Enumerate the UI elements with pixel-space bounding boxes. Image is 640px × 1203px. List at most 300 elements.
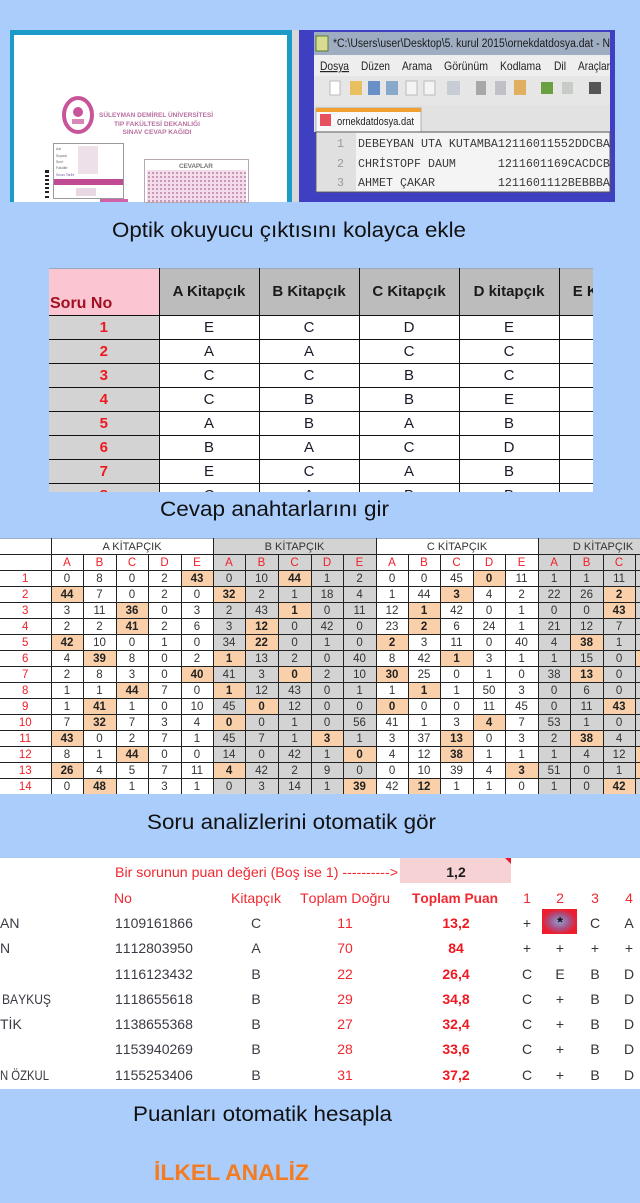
panel: item analysis table: 0: [291, 620, 298, 632]
panel: score table: [0, 858, 640, 1089]
panel: item analysis table: 1: [551, 652, 557, 664]
file contents: 1: [337, 137, 344, 151]
total score: 37,2: [442, 1067, 470, 1083]
student numbers: 1155253406: [115, 1067, 193, 1083]
panel: item analysis table: 0: [583, 764, 590, 776]
panel: item analysis table: 3: [518, 684, 525, 696]
panel: item analysis table: 8: [96, 572, 103, 584]
panel: item analysis table: 1: [421, 684, 427, 696]
panel: item analysis table: 3: [453, 716, 460, 728]
panel: answer key table: A Kitapçık: [173, 283, 245, 300]
panel: item analysis table: 10: [93, 636, 106, 648]
panel: item analysis table: D KİTAPÇIK: [573, 540, 633, 552]
panel: item analysis table: 0: [356, 636, 363, 648]
panel: item analysis table: 12: [418, 780, 430, 792]
panel: answer key table: B: [504, 462, 514, 480]
total score: 84: [448, 940, 464, 956]
panel: item analysis table: 12: [255, 620, 268, 632]
panel: item analysis table: 1: [453, 652, 460, 664]
panel: item analysis table: D: [323, 556, 331, 568]
panel: item analysis table: 42: [288, 748, 301, 760]
student names: AN: [0, 915, 19, 931]
answers per question: D: [624, 1067, 634, 1083]
panel: item analysis table: 39: [93, 652, 106, 664]
student numbers: 1118655618: [115, 991, 193, 1007]
panel: item analysis table: 0: [226, 780, 232, 792]
panel: item analysis table: 26: [61, 764, 73, 776]
panel: item analysis table: 44: [288, 572, 301, 584]
panel: item analysis table: 40: [515, 636, 528, 648]
panel: item analysis table: 0: [291, 668, 298, 680]
panel: item analysis table: 10: [418, 764, 430, 776]
window title bar: *C:\Users\user\Desktop\5. kurul 2015\ornekdatdosya.dat - N: [333, 38, 610, 50]
panel: item analysis table: 12: [418, 748, 430, 760]
panel: item analysis table: 42: [386, 780, 398, 792]
panel: item analysis table: 32: [223, 588, 235, 600]
file contents: [316, 132, 610, 192]
student names: N ÖZKUL: [0, 1066, 49, 1083]
total correct: [337, 915, 353, 1083]
panel: answer key table: 5: [100, 414, 108, 432]
panel: item analysis table: 2: [421, 620, 427, 632]
panel: item analysis table: 10: [353, 668, 366, 680]
panel: item analysis table: 11: [483, 700, 495, 712]
panel: item analysis table: [0, 538, 640, 794]
menu bar: Arama: [402, 59, 432, 73]
panel: item analysis table: 11: [516, 572, 528, 584]
panel: answer key table: 4: [100, 390, 108, 408]
panel: item analysis table: 26: [580, 588, 593, 600]
panel: item analysis table: 9: [22, 700, 28, 712]
panel: item analysis table: 8: [22, 684, 28, 696]
panel: item analysis table: 2: [356, 572, 363, 584]
answers per question: +: [556, 1067, 564, 1083]
panel: item analysis table: 38: [580, 732, 593, 744]
panel: item analysis table: 4: [194, 716, 200, 728]
panel: item analysis table: 39: [353, 780, 366, 792]
student names: TİK: [0, 1015, 22, 1032]
panel: item analysis table: 43: [613, 700, 625, 712]
panel: item analysis table: 1: [291, 732, 298, 744]
panel: answer key table: C Kitapçık: [372, 283, 446, 300]
panel: item analysis table: 0: [421, 572, 427, 584]
panel: item analysis table: 2: [389, 636, 395, 648]
column headers: Toplam Puan: [412, 890, 498, 906]
panel: item analysis table: 3: [258, 780, 265, 792]
panel: item analysis table: 0: [486, 604, 492, 616]
panel: answer key table: 7: [100, 462, 108, 480]
panel: item analysis table: 0: [324, 604, 330, 616]
panel: item analysis table: 9: [324, 764, 330, 776]
panel: item analysis table: 3: [486, 652, 492, 664]
booklet letters: B: [251, 991, 261, 1007]
panel: answer key table: A: [304, 342, 314, 360]
panel: item analysis table: 3: [258, 668, 265, 680]
panel: item analysis table: 0: [616, 716, 622, 728]
panel: item analysis table: 0: [551, 604, 557, 616]
panel: item analysis table: 0: [421, 700, 427, 712]
answers per question: [522, 915, 634, 1083]
panel: item analysis table: 1: [22, 572, 28, 584]
panel: item analysis table: B KİTAPÇIK: [265, 540, 324, 552]
panel: item analysis table: 3: [453, 588, 460, 600]
file contents: AHMET ÇAKAR 1211601112BEBBBA: [358, 176, 610, 190]
panel: item analysis table: 1: [194, 780, 200, 792]
column headers: [114, 890, 633, 906]
panel: answer key table: A: [404, 462, 414, 480]
panel: item analysis table: 34: [223, 636, 235, 648]
column headers: Toplam Doğru: [300, 890, 390, 906]
panel: item analysis table: 7: [518, 716, 525, 728]
timing marks: [45, 170, 49, 198]
panel: item analysis table: 0: [616, 668, 622, 680]
student info box: Sınav Tarihi: [56, 173, 74, 177]
panel: answer key table: Soru No: [50, 295, 112, 312]
answers per question: E: [555, 966, 565, 982]
panel: answer key table: B: [404, 366, 414, 384]
column headers: 3: [591, 890, 599, 906]
panel: item analysis table: 1: [226, 684, 232, 696]
answers per question: C: [522, 1016, 532, 1032]
panel: item analysis table: 3: [22, 604, 28, 616]
panel: item analysis table: 2: [291, 764, 298, 776]
menu bar: Dosya: [320, 59, 349, 73]
panel: item analysis table: 7: [616, 620, 622, 632]
panel: item analysis table: 0: [64, 780, 70, 792]
panel: item analysis table: 1: [486, 668, 492, 680]
student numbers: 1112803950: [115, 940, 193, 956]
booklet letters: A: [251, 940, 261, 956]
panel: item analysis table: 3: [324, 732, 330, 744]
panel: item analysis table: 0: [129, 572, 135, 584]
panel: item analysis table: 4: [22, 620, 28, 632]
answers per question: +: [556, 940, 564, 956]
panel: item analysis table: 45: [223, 732, 235, 744]
student numbers: [115, 915, 193, 1083]
panel: item analysis table: 0: [258, 716, 265, 728]
panel: item analysis table: 45: [450, 572, 463, 584]
panel: item analysis table: 4: [226, 764, 232, 776]
panel: item analysis table: 13: [580, 668, 593, 680]
file tab: ornekdatdosya.dat: [337, 116, 414, 128]
panel: item analysis table: 4: [551, 636, 557, 648]
panel: item analysis table: 0: [356, 620, 363, 632]
panel: item analysis table: 1: [96, 684, 103, 696]
panel: item analysis table: 25: [418, 668, 430, 680]
total correct: 27: [337, 1016, 353, 1032]
panel: item analysis table: 2: [64, 668, 70, 680]
panel: item analysis table: 15: [580, 652, 593, 664]
panel: item analysis table: 0: [258, 748, 265, 760]
panel: item analysis table: 51: [548, 764, 560, 776]
panel: answer key table: 3: [100, 366, 108, 384]
panel: item analysis table: 21: [548, 620, 560, 632]
panel: answer key table: C: [304, 318, 314, 336]
panel: answer key table: B Kitapçık: [272, 283, 346, 300]
panel: answer key table: D: [504, 438, 514, 456]
panel: answer key table: A: [204, 414, 214, 432]
panel: item analysis table: 42: [613, 780, 625, 792]
panel: item analysis table: 11: [613, 572, 625, 584]
menu bar: Araçlar: [578, 59, 610, 73]
total correct: 70: [337, 940, 353, 956]
panel: item analysis table: 44: [418, 588, 430, 600]
answers box: [144, 160, 248, 202]
answers per question: +: [591, 940, 599, 956]
panel: item analysis table: 8: [64, 748, 70, 760]
file contents: DEBEYBAN UTA KUTAMBA12116011552DDCBA: [358, 137, 610, 151]
panel: item analysis table: 48: [93, 780, 106, 792]
panel: item analysis table: 0: [486, 636, 492, 648]
panel: answer key table: B: [404, 390, 414, 408]
panel: item analysis table: 10: [19, 716, 32, 728]
toolbar icons: [314, 76, 610, 105]
panel: item analysis table: 1: [291, 588, 298, 600]
panel: item analysis table: 1: [129, 780, 135, 792]
panel: item analysis table: 2: [291, 652, 298, 664]
panel: item analysis table: 1: [583, 572, 590, 584]
panel: item analysis table: 1: [421, 604, 427, 616]
total correct: 31: [337, 1067, 353, 1083]
panel: item analysis table: 1: [96, 748, 103, 760]
panel: item analysis table: 0: [389, 572, 395, 584]
student numbers: 1138655368: [115, 1016, 193, 1032]
panel: item analysis table: 43: [61, 732, 73, 744]
panel: item analysis table: 1: [453, 780, 460, 792]
panel: answer key table: E: [504, 390, 514, 408]
answers per question: C: [522, 1041, 532, 1057]
answers box: CEVAPLAR: [179, 163, 213, 170]
student numbers: 1153940269: [115, 1041, 193, 1057]
panel: item analysis table: B: [420, 556, 428, 568]
panel: item analysis table: 2: [161, 588, 168, 600]
panel: item analysis table: 24: [483, 620, 495, 632]
panel: item analysis table: 0: [161, 604, 168, 616]
student info box: Adı: [56, 147, 61, 151]
student info box: [54, 144, 124, 198]
panel: item analysis table: 1: [291, 604, 298, 616]
panel: item analysis table: 5: [129, 764, 135, 776]
answers per question: C: [522, 1067, 532, 1083]
total correct: 11: [337, 915, 353, 931]
panel: item analysis table: 43: [288, 684, 301, 696]
panel: item analysis table: 0: [583, 780, 590, 792]
panel: item analysis table: 6: [583, 684, 590, 696]
panel: answer key table: C: [204, 390, 214, 408]
panel: data file window: [299, 30, 615, 202]
title: İLKEL ANALİZ: İLKEL ANALİZ: [154, 1160, 309, 1185]
total correct: 22: [337, 966, 353, 982]
panel: item analysis table: 3: [194, 604, 200, 616]
panel: item analysis table: 3: [226, 620, 232, 632]
panel: item analysis table: 42: [418, 652, 430, 664]
panel: item analysis table: 1: [324, 572, 330, 584]
panel: answer key table: E: [204, 462, 214, 480]
panel: item analysis table: 3: [518, 732, 525, 744]
highlighted cell: [542, 909, 577, 934]
icon: university seal: [64, 98, 92, 132]
answers per question: B: [590, 991, 600, 1007]
panel: item analysis table: 0: [194, 636, 200, 648]
panel: item analysis table: A: [550, 556, 558, 568]
panel: answer key table: B: [304, 414, 314, 432]
booklet letters: C: [251, 915, 261, 931]
panel: item analysis table: 7: [96, 588, 103, 600]
panel: item analysis table: 3: [518, 764, 525, 776]
panel: item analysis table: 0: [96, 732, 103, 744]
panel: item analysis table: 4: [486, 764, 492, 776]
panel: item analysis table: 11: [354, 604, 365, 616]
column headers: 4: [625, 890, 633, 906]
menu bar: [314, 55, 610, 76]
total score: [442, 915, 470, 1083]
score per question setting: 1,2: [446, 864, 466, 880]
panel: item analysis table: 11: [19, 732, 31, 744]
panel: item analysis table: 4: [356, 588, 363, 600]
panel: item analysis table: 7: [22, 668, 28, 680]
panel: item analysis table: 7: [258, 732, 265, 744]
panel: item analysis table: A: [225, 556, 233, 568]
panel: item analysis table: 0: [389, 764, 395, 776]
panel: item analysis table: 13: [255, 652, 268, 664]
panel: item analysis table: 0: [226, 572, 232, 584]
panel: item analysis table: 43: [191, 572, 203, 584]
panel: item analysis table: 2: [129, 732, 135, 744]
sheet heading: TIP FAKÜLTESİ DEKANLIĞI: [114, 119, 200, 128]
panel: item analysis table: 1: [389, 684, 395, 696]
panel: item analysis table: 3: [161, 716, 168, 728]
panel: item analysis table: 37: [418, 732, 430, 744]
panel: item analysis table: 0: [486, 732, 492, 744]
panel: answer key table: B: [204, 438, 214, 456]
answers per question: +: [625, 940, 633, 956]
booklet letters: B: [251, 1016, 261, 1032]
answers per question: D: [624, 1041, 634, 1057]
panel: item analysis table: 38: [450, 748, 463, 760]
panel: item analysis table: A: [388, 556, 396, 568]
panel: answer key table: [49, 268, 593, 492]
panel: item analysis table: 12: [386, 604, 398, 616]
panel: item analysis table: 0: [258, 700, 265, 712]
menu bar: Kodlama: [500, 59, 541, 73]
panel: item analysis table: 1: [356, 684, 363, 696]
panel: item analysis table: 0: [518, 780, 525, 792]
panel: item analysis table: 7: [64, 716, 70, 728]
panel: item analysis table: 4: [583, 748, 590, 760]
panel: item analysis table: 8: [129, 652, 135, 664]
panel: item analysis table: 42: [450, 604, 463, 616]
panel: item analysis table: 42: [255, 764, 268, 776]
answers per question: D: [624, 991, 634, 1007]
answers per question: A: [624, 915, 634, 931]
panel: item analysis table: 11: [581, 700, 593, 712]
panel: item analysis table: 1: [486, 780, 492, 792]
panel: item analysis table: E: [356, 556, 363, 568]
panel: item analysis table: 0: [129, 636, 135, 648]
panel: item analysis table: 11: [451, 636, 462, 648]
panel: answer key table: B: [304, 390, 314, 408]
panel: answer key table: C: [404, 438, 414, 456]
column headers: Kitapçık: [231, 890, 282, 906]
panel: item analysis table: 42: [321, 620, 333, 632]
panel: item analysis table: 2: [161, 572, 168, 584]
booklet letters: B: [251, 966, 261, 982]
panel: item analysis table: 1: [226, 652, 232, 664]
panel: item analysis table: 45: [515, 700, 528, 712]
panel: item analysis table: 0: [616, 652, 622, 664]
panel: item analysis table: 3: [161, 780, 168, 792]
panel: item analysis table: 4: [486, 588, 492, 600]
panel: answer key table: E: [504, 318, 514, 336]
student names: [0, 915, 51, 1083]
score per question setting: Bir sorunun puan değeri (Boş ise 1) ---------->: [115, 864, 398, 880]
panel: item analysis table: 2: [324, 668, 330, 680]
answers per question: +: [556, 1041, 564, 1057]
answers per question: C: [590, 915, 600, 931]
panel: item analysis table: 2: [22, 588, 28, 600]
panel: item analysis table: 22: [548, 588, 560, 600]
panel: item analysis table: D: [160, 556, 169, 568]
panel: answer key table: C: [404, 342, 414, 360]
panel: item analysis table: 3: [421, 636, 427, 648]
caption: calculate scores automatically: Puanları otomatik hesapla: [133, 1103, 392, 1126]
panel: item analysis table: 1: [583, 716, 590, 728]
student numbers: 1109161866: [115, 915, 193, 931]
panel: item analysis table: 0: [551, 684, 557, 696]
panel: item analysis table: 1: [421, 716, 427, 728]
panel: item analysis table: 8: [389, 652, 395, 664]
panel: item analysis table: 0: [518, 668, 525, 680]
answers per question: C: [522, 966, 532, 982]
panel: item analysis table: 6: [194, 620, 200, 632]
caption: enter answer keys: Cevap anahtarlarını gir: [160, 498, 389, 521]
panel: item analysis table: 0: [194, 748, 200, 760]
panel: item analysis table: 38: [548, 668, 560, 680]
answers per question: D: [624, 1016, 634, 1032]
panel: item analysis table: 41: [126, 620, 138, 632]
panel: item analysis table: 1: [518, 620, 525, 632]
menu bar: Düzen: [361, 59, 390, 73]
panel: item analysis table: 23: [386, 620, 398, 632]
total score: 34,8: [442, 991, 470, 1007]
panel: item analysis table: 2: [258, 588, 265, 600]
booklet letters: B: [251, 1067, 261, 1083]
panel: answer key table: C: [204, 366, 214, 384]
student info box: Soyadı: [56, 154, 67, 158]
panel: item analysis table: E: [193, 556, 201, 568]
panel: item analysis table: 0: [64, 572, 70, 584]
panel: item analysis table: 2: [161, 620, 168, 632]
answers per question: B: [590, 1016, 600, 1032]
column headers: No: [114, 890, 132, 906]
panel: answer key table: C: [504, 342, 514, 360]
answers per question: +: [523, 940, 531, 956]
panel: item analysis table: 7: [161, 732, 168, 744]
panel: item analysis table: 1: [551, 748, 557, 760]
column headers: 2: [556, 890, 564, 906]
panel: item analysis table: 0: [324, 716, 330, 728]
panel: item analysis table: 39: [450, 764, 463, 776]
panel: item analysis table: 1: [389, 588, 395, 600]
panel: item analysis table: 1: [518, 604, 525, 616]
panel: item analysis table: 0: [161, 748, 168, 760]
panel: item analysis table: 0: [486, 572, 492, 584]
panel: item analysis table: 12: [255, 684, 268, 696]
panel: item analysis table: 0: [453, 700, 460, 712]
panel: answer key table: A: [404, 414, 414, 432]
file contents: CHRİSTOPF DAUM 1211601169CACDCB: [358, 157, 610, 171]
panel: item analysis table: 6: [453, 620, 460, 632]
